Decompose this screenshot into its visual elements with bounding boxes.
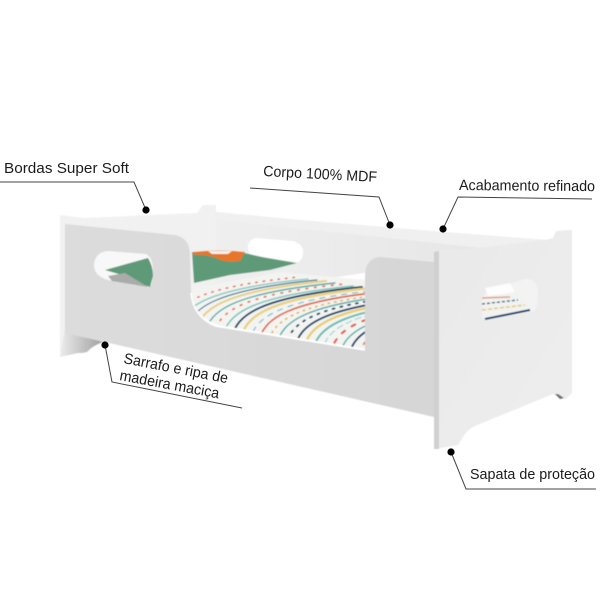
right handle opening — [482, 279, 538, 320]
mattress — [194, 276, 366, 348]
front rail panel — [65, 224, 434, 417]
callout: Sarrafo e ripa de madeira maciça — [101, 341, 242, 408]
callout: Corpo 100% MDF — [250, 163, 394, 229]
callout: Acabamento refinado: Acabamento refinado — [459, 177, 595, 195]
pillow — [192, 250, 297, 283]
infographic: bed with annotated features — [0, 162, 596, 490]
bed illustration — [60, 205, 572, 449]
underside and left foot — [60, 330, 103, 357]
callout: Sarrafo e ripa de madeira maciça: madeira maciça — [118, 367, 221, 402]
callout: Bordas Super Soft: Bordas Super Soft — [4, 160, 130, 177]
back panel — [190, 212, 547, 300]
callout: Bordas Super Soft — [0, 160, 150, 214]
callout: Sapata de proteção: Sapata de proteção — [470, 466, 595, 483]
callout: Sapata de proteção — [447, 448, 596, 489]
notch rim highlight — [191, 293, 365, 350]
left rail handle opening — [94, 251, 153, 287]
callout: Corpo 100% MDF: Corpo 100% MDF — [263, 163, 378, 186]
right end panel — [434, 230, 572, 449]
left end panel — [60, 205, 216, 357]
callout: Acabamento refinado — [439, 177, 595, 233]
callout: Sarrafo e ripa de madeira maciça: Sarrafo e ripa de — [122, 350, 230, 387]
